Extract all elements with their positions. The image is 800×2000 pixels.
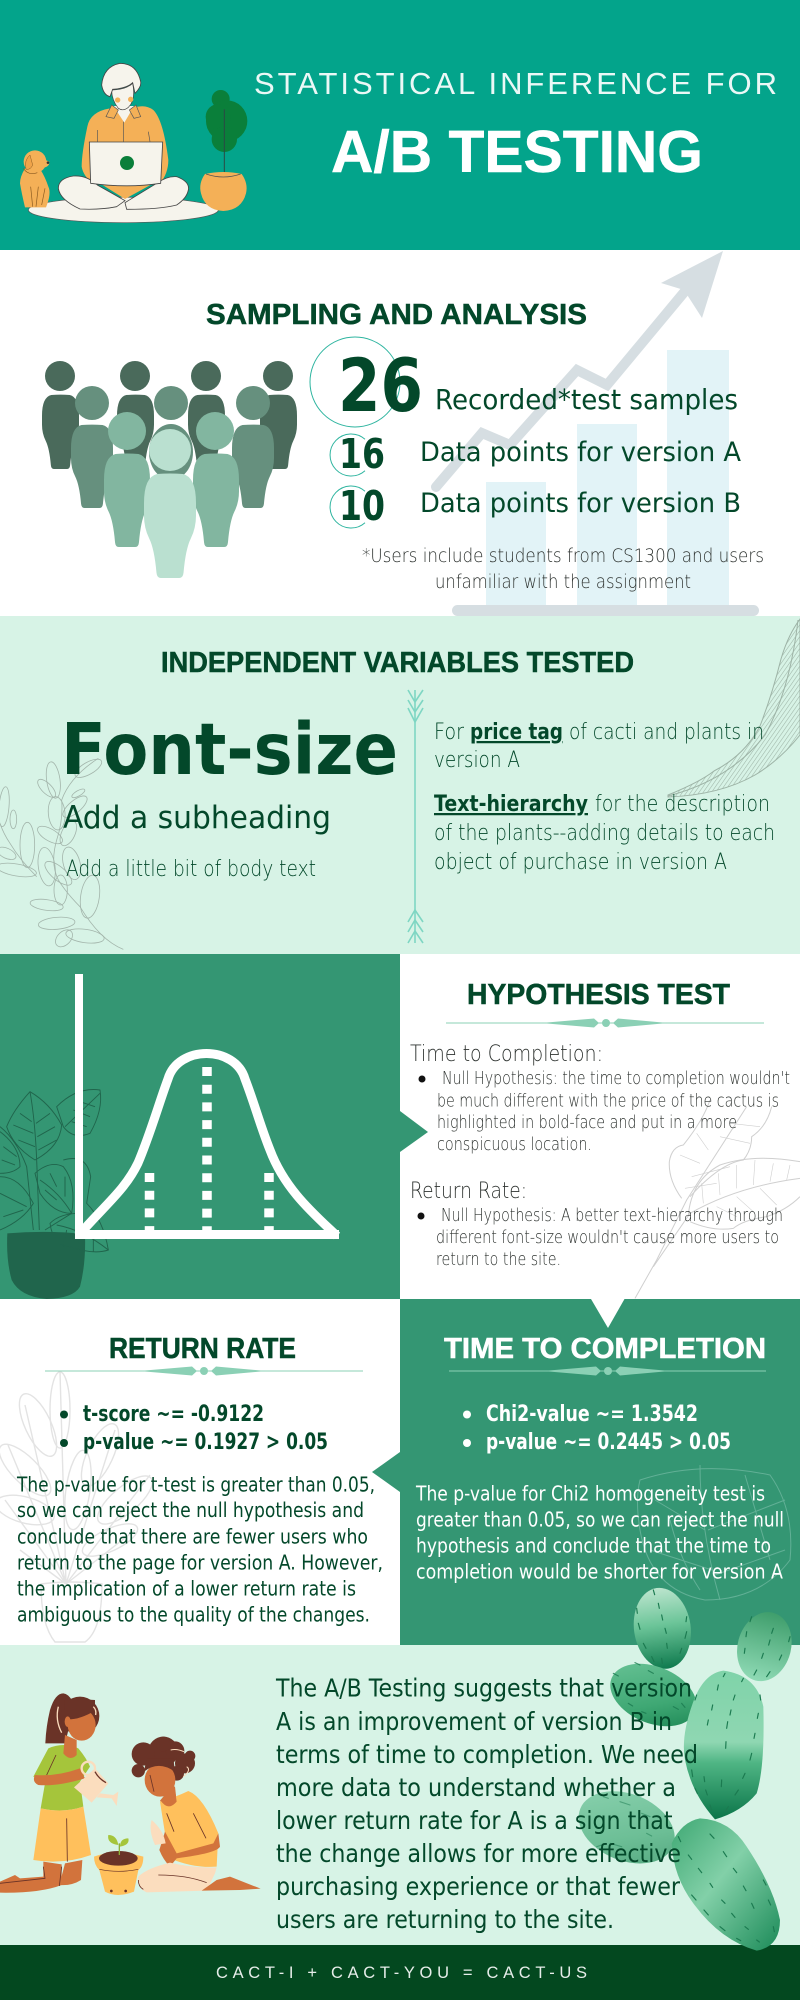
list: return rate statistics: p-value ~= 0.1927 > 0.05 (83, 1430, 328, 1455)
text: price tag variable: For (434, 719, 465, 745)
title: statistical inference for: STATISTICAL INFERENCE FOR (254, 66, 777, 101)
text: return rate null hypothesis (410, 1178, 783, 1270)
text: price tag variable: version A (434, 747, 520, 773)
icon: olive branch line art (0, 756, 123, 950)
text: body placeholder: Add a little bit of body text (66, 857, 316, 882)
panel: independent variables background (0, 616, 800, 954)
title: A/B testing: A/B TESTING (331, 119, 703, 185)
panel: return rate background (0, 1299, 400, 1645)
text: conclusion: more data to understand whether a (276, 1773, 676, 1802)
heading: time to completion: TIME TO COMPLETION (444, 1333, 766, 1365)
text: return rate conclusion: The p-value for t-test is greater than 0.05, (16, 1472, 375, 1496)
arrow: pointer from bell curve panel (400, 1111, 428, 1152)
text: return rate conclusion: conclude that there are fewer users who (17, 1525, 368, 1549)
panel: bell curve background (0, 954, 400, 1299)
arrow: pointer from hypothesis panel (591, 1299, 624, 1328)
text: conclusion: terms of time to completion. We need (276, 1740, 698, 1769)
list: return rate statistics: t-score ~= -0.9122 (83, 1402, 264, 1427)
text: users footnote (362, 546, 764, 593)
stat: 16 data points for version A: Data points for version A (420, 437, 741, 468)
text: conclusion: users are returning to the site. (276, 1905, 614, 1934)
text: time to completion null hypothesis: conspicuous location. (437, 1135, 592, 1155)
text: conclusion: the change allows for more effective (276, 1839, 681, 1868)
stat: 10 data points for version B: 10 (339, 482, 385, 530)
text: conclusion (275, 1674, 698, 1934)
text: time to completion null hypothesis (410, 1041, 790, 1155)
text: text-hierarchy variable: Text-hierarchy (434, 791, 588, 817)
text: conclusion: purchasing experience or that fewer (276, 1872, 681, 1901)
text: subheading: Add a subheading (63, 800, 331, 836)
panel: time to completion background (400, 1299, 800, 1645)
arrow: pointer from time to completion panel (372, 1452, 400, 1492)
divider: arrow line (408, 690, 423, 943)
icon: crowd of people (42, 361, 297, 578)
text: return rate conclusion: return to the page for version A. However, (17, 1550, 383, 1574)
divider: ornament under return rate (45, 1366, 363, 1376)
text: conclusion: The A/B Testing suggests that version (275, 1674, 692, 1703)
text: time to completion null hypothesis: Time to Completion: (410, 1041, 603, 1067)
heading: sampling and analysis: SAMPLING AND ANALYSIS (206, 299, 587, 331)
text: text-hierarchy variable: for the description (595, 791, 770, 817)
panel: sampling background (0, 250, 800, 616)
footer text: CACT-I + CACT-YOU = CACT-US (216, 1964, 587, 1982)
text: time to completion conclusion (415, 1482, 784, 1584)
list: time to completion statistics: p-value ~= 0.2445 > 0.05 (486, 1430, 731, 1455)
text: conclusion: A is an improvement of version B in (276, 1707, 672, 1736)
stat: 10 data points for version B (330, 482, 741, 530)
text: price tag variable: price tag (470, 719, 563, 745)
icon: potted plant line art in return rate panel (0, 1372, 159, 1642)
panel: conclusion background (0, 1645, 800, 1945)
text: return rate conclusion (16, 1472, 383, 1626)
heading: font-size: Font-size (61, 708, 398, 791)
icon: woman with laptop, dog and plant (20, 63, 247, 223)
list: return rate statistics (60, 1402, 328, 1455)
list: time to completion statistics: Chi2-value ~= 1.3542 (486, 1402, 698, 1427)
text: text-hierarchy variable (434, 791, 775, 875)
divider: ornament under time to completion (449, 1366, 766, 1376)
text: return rate conclusion: the implication of a lower return rate is (17, 1577, 356, 1601)
stat: 26 recorded test samples: 26 (338, 344, 423, 429)
icon: leaf line art in hypothesis panel (635, 1100, 800, 1298)
heading: return rate: RETURN RATE (109, 1333, 296, 1365)
text: return rate null hypothesis: Return Rate: (410, 1178, 527, 1204)
icon: children watering a plant (0, 1693, 261, 1895)
text: users footnote: *Users include students from CS1300 and users (362, 546, 764, 567)
icon: monstera line art in time to completion panel (638, 1465, 791, 1600)
text: price tag variable (434, 719, 764, 773)
panel: header background (0, 0, 800, 250)
stat: 16 data points for version A: 16 (339, 430, 385, 478)
text: users footnote: unfamiliar with the assignment (435, 572, 691, 593)
icon: feather leaf line art (668, 619, 800, 797)
stat: 10 data points for version B: Data points for version B (420, 488, 741, 519)
text: conclusion: lower return rate for A is a sign that (276, 1806, 673, 1835)
stat: 26 recorded test samples: Recorded*test samples (435, 383, 738, 416)
chart: rising bars and arrow (436, 251, 759, 616)
text: text-hierarchy variable: object of purchase in version A (434, 849, 727, 875)
stat: 16 data points for version A (330, 430, 741, 478)
stat: 26 recorded test samples (310, 337, 738, 429)
icon: monstera plant in pot (0, 1090, 108, 1299)
text: return rate conclusion: ambiguous to the quality of the changes. (17, 1602, 370, 1626)
chart: bell curve (75, 974, 339, 1239)
text: time to completion null hypothesis: highlighted in bold-face and put in a more (437, 1113, 737, 1133)
text: return rate conclusion: so we can reject the null hypothesis and (17, 1498, 364, 1522)
icon: cactus (568, 1584, 799, 1951)
text: price tag variable: of cacti and plants in (569, 719, 764, 745)
panel: footer background (0, 1945, 800, 2000)
divider: ornament under hypothesis test (446, 1018, 764, 1028)
list: time to completion statistics (463, 1402, 731, 1455)
panel: hypothesis test background (400, 954, 800, 1299)
heading: independent variables tested: INDEPENDENT VARIABLES TESTED (161, 647, 634, 679)
text: return rate null hypothesis: return to the site. (436, 1250, 561, 1270)
heading: hypothesis test: HYPOTHESIS TEST (467, 979, 730, 1011)
